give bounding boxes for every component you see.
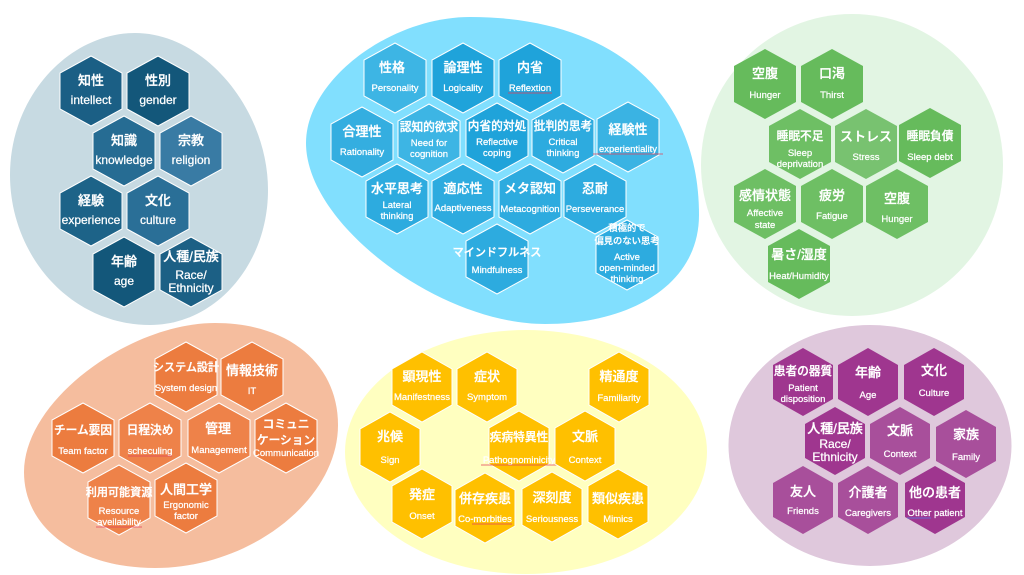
hex: hunger (2): Hunger bbox=[881, 214, 913, 225]
hex: knowledge: knowledge bbox=[95, 153, 153, 167]
hex: heat/humidity bbox=[768, 229, 830, 299]
hex: ergonomic factor bbox=[155, 463, 217, 533]
hex: family bbox=[936, 410, 996, 478]
hex: metacognition bbox=[499, 164, 561, 234]
hex: religion: 宗教 bbox=[178, 133, 204, 148]
hex: experientiality: 経験性 bbox=[608, 122, 648, 137]
hex: hunger (2) bbox=[866, 169, 928, 239]
hex: family: Family bbox=[952, 452, 980, 463]
hex: active open-minded thinking bbox=[594, 220, 660, 290]
hex: team factor: チーム要因 bbox=[54, 424, 112, 437]
hex: co-morbidities: 併存疾患 bbox=[459, 491, 511, 506]
hex: reflective coping: 内省的対処 bbox=[468, 119, 527, 133]
hex: race/ethnicity: Ethnicity bbox=[168, 281, 214, 295]
hex: sleep debt: Sleep debt bbox=[907, 152, 953, 163]
hex: age: 年齢 bbox=[855, 365, 881, 380]
hex: other patient: Other patient bbox=[908, 508, 963, 519]
hex: age bbox=[93, 237, 155, 307]
hex: friends: Friends bbox=[787, 506, 819, 517]
hex: management bbox=[188, 403, 250, 473]
hex: personality bbox=[364, 43, 426, 113]
hex: IT: 情報技術 bbox=[226, 363, 278, 378]
hex: need for cognition: Need for bbox=[411, 138, 447, 149]
hex: context bbox=[870, 407, 930, 475]
hex: communication: コミュニ bbox=[263, 418, 309, 431]
hex: friends bbox=[773, 466, 833, 534]
hex: active open-minded thinking: 偏見のない思考 bbox=[594, 235, 660, 246]
hex: heat/humidity: 暑さ/湿度 bbox=[771, 247, 827, 262]
hex: mimics bbox=[588, 469, 648, 539]
hex: knowledge bbox=[93, 116, 155, 186]
hex: stress: Stress bbox=[853, 152, 880, 163]
hex: family: 家族 bbox=[953, 427, 979, 442]
hex: adaptiveness: 適応性 bbox=[443, 181, 483, 196]
hex: age: age bbox=[114, 274, 134, 288]
hex: sleep deprivation: deprivation bbox=[777, 159, 823, 170]
hex: critical thinking bbox=[532, 103, 594, 173]
hex: reflexion: 内省 bbox=[517, 60, 543, 75]
hex: experientiality bbox=[593, 102, 663, 172]
hex: lateral thinking: 水平思考 bbox=[371, 181, 423, 196]
hex: culture bbox=[904, 348, 964, 416]
hex: mimics: 類似疾患 bbox=[592, 491, 644, 506]
hex: critical thinking: Critical bbox=[548, 137, 578, 148]
panel background bbox=[306, 17, 699, 324]
hex: context bbox=[555, 411, 615, 481]
hex: personality: Personality bbox=[372, 83, 419, 94]
hex: affective state: Affective bbox=[747, 208, 783, 219]
hex: mindfulness bbox=[453, 224, 541, 294]
hex: adaptiveness bbox=[432, 164, 494, 234]
hex: hunger (2): 空腹 bbox=[884, 191, 910, 206]
hex: race/ethnicity: 人種/民族 bbox=[807, 421, 863, 436]
hex: personality: 性格 bbox=[379, 60, 405, 75]
hex: other patient bbox=[905, 466, 965, 534]
hex: religion bbox=[160, 116, 222, 186]
hex: familiarity: Familiarity bbox=[597, 393, 641, 404]
hex: sign: 兆候 bbox=[377, 429, 403, 444]
hex: familiarity: 精通度 bbox=[599, 369, 639, 384]
hex: ergonomic factor: Ergonomic bbox=[163, 500, 209, 511]
panel: disease factors (yellow) bbox=[345, 330, 707, 574]
hex: onset bbox=[392, 469, 452, 539]
hex: management: 管理 bbox=[205, 421, 231, 436]
hex: team factor bbox=[52, 403, 114, 473]
hex: race/ethnicity: 人種/民族 bbox=[163, 249, 219, 264]
hex: logicality: 論理性 bbox=[443, 60, 483, 75]
panel background bbox=[24, 323, 338, 568]
hex: mindfulness: マインドフルネス bbox=[453, 246, 541, 259]
hex: active open-minded thinking: thinking bbox=[611, 274, 643, 285]
hex: race/ethnicity: Ethnicity bbox=[812, 450, 858, 464]
panel background bbox=[10, 33, 268, 325]
hex: lateral thinking: thinking bbox=[381, 211, 413, 222]
hex: experientiality: experientiality bbox=[599, 144, 657, 155]
hex: scheduling: scheculing bbox=[128, 446, 172, 457]
hex: seriousness bbox=[522, 472, 582, 542]
hex: reflective coping: Reflective bbox=[476, 137, 518, 148]
hex: sleep debt: 睡眠負債 bbox=[907, 129, 954, 143]
hex: reflexion: Reflextion bbox=[509, 83, 551, 94]
hex: fatigue bbox=[801, 169, 863, 239]
hex: need for cognition: 認知的欲求 bbox=[400, 120, 459, 134]
hex: resource availability: aveilability bbox=[97, 517, 141, 528]
hex: friends: 友人 bbox=[790, 484, 816, 499]
hex: intellect: intellect bbox=[71, 93, 112, 107]
panel: patient and social factors (purple) bbox=[728, 325, 1012, 566]
hex: culture: 文化 bbox=[921, 363, 947, 378]
hex: co-morbidities: Co-morbities bbox=[458, 514, 512, 525]
hex: critical thinking: 批判的思考 bbox=[534, 119, 592, 133]
hex: sleep deprivation: 睡眠不足 bbox=[777, 129, 824, 143]
hex: sleep deprivation bbox=[769, 109, 831, 179]
hex: resource availability: Resource bbox=[99, 506, 139, 517]
hex: pathognomonicity bbox=[481, 411, 557, 481]
hex: hunger: Hunger bbox=[749, 90, 781, 101]
hex: perseverance bbox=[564, 164, 626, 234]
hex: culture: Culture bbox=[919, 388, 949, 399]
hex: team factor: Team factor bbox=[58, 446, 108, 457]
hex: mindfulness: Mindfulness bbox=[472, 265, 523, 276]
hex: scheduling bbox=[119, 403, 181, 473]
hex: race/ethnicity bbox=[805, 407, 865, 475]
hex: system design bbox=[153, 342, 219, 412]
hex: pathognomonicity: Pathognominicity bbox=[483, 455, 555, 466]
hex: logicality bbox=[432, 43, 494, 113]
hex: perseverance: 忍耐 bbox=[582, 181, 608, 196]
hex: fatigue: Fatigue bbox=[816, 211, 848, 222]
hex: culture: culture bbox=[140, 213, 176, 227]
hex: hunger bbox=[734, 49, 796, 119]
hex: manifestness bbox=[392, 352, 452, 422]
hex: need for cognition: cognition bbox=[410, 149, 448, 160]
hex: metacognition: Metacognition bbox=[500, 204, 560, 215]
hex: experience: experience bbox=[62, 213, 121, 227]
hex: mimics: Mimics bbox=[603, 514, 633, 525]
panel background bbox=[728, 325, 1012, 566]
hex: race/ethnicity bbox=[160, 237, 222, 307]
hex: co-morbidities bbox=[455, 473, 515, 543]
hex: symptom bbox=[457, 352, 517, 422]
hex: affective state: state bbox=[755, 220, 775, 231]
panel: physiological factors (green) bbox=[701, 14, 1003, 316]
hex: rationality: 合理性 bbox=[342, 124, 382, 139]
hex: hunger: 空腹 bbox=[752, 66, 778, 81]
hex: logicality: Logicality bbox=[443, 83, 483, 94]
hex: race/ethnicity: Race/ bbox=[819, 437, 851, 451]
hex: rationality: Rationality bbox=[340, 147, 384, 158]
hex: sign bbox=[360, 412, 420, 482]
hex: age: 年齢 bbox=[111, 254, 137, 269]
hex: onset: 発症 bbox=[409, 487, 435, 502]
hex: familiarity bbox=[589, 352, 649, 422]
hex: context: 文脈 bbox=[572, 429, 598, 444]
hex: experience bbox=[60, 176, 122, 246]
hex: active open-minded thinking: Active bbox=[614, 252, 640, 263]
hex: stress bbox=[835, 109, 897, 179]
hex: religion: religion bbox=[172, 153, 210, 167]
hex: perseverance: Perseverance bbox=[566, 204, 624, 215]
hex: experience: 経験 bbox=[78, 193, 104, 208]
hex: reflective coping: coping bbox=[483, 148, 511, 159]
hex: pathognomonicity: 疾病特異性 bbox=[490, 430, 549, 444]
hex: patient disposition: disposition bbox=[781, 394, 825, 405]
hex: scheduling: 日程決め bbox=[127, 423, 173, 437]
hex: intellect bbox=[60, 56, 122, 126]
hex: communication: Communication bbox=[253, 448, 319, 459]
hex: symptom: 症状 bbox=[474, 369, 500, 384]
hex: caregivers: Caregivers bbox=[845, 508, 891, 519]
hex: thirst: Thirst bbox=[820, 90, 844, 101]
hex: affective state: 感情状態 bbox=[739, 188, 791, 203]
hex: heat/humidity: Heat/Humidity bbox=[769, 271, 829, 282]
hex: lateral thinking: Lateral bbox=[382, 200, 412, 211]
hex: ergonomic factor: factor bbox=[174, 511, 198, 522]
hex: race/ethnicity: Race/ bbox=[175, 268, 207, 282]
hex: context: Context bbox=[569, 455, 602, 466]
hex: caregivers bbox=[838, 466, 898, 534]
hex: gender bbox=[127, 56, 189, 126]
hex: IT bbox=[221, 342, 283, 412]
hex: active open-minded thinking: 積極的で bbox=[608, 222, 646, 233]
panel background bbox=[345, 330, 707, 574]
hex: knowledge: 知識 bbox=[111, 133, 137, 148]
hex: system design: System design bbox=[155, 383, 217, 394]
hex: other patient: 他の患者 bbox=[909, 485, 961, 500]
hex: patient disposition bbox=[773, 348, 833, 416]
hex: communication bbox=[253, 403, 319, 473]
hex: context: Context bbox=[884, 449, 917, 460]
hex: onset: Onset bbox=[409, 511, 435, 522]
hex: communication: ケーション bbox=[257, 434, 315, 447]
hex: lateral thinking bbox=[366, 164, 428, 234]
panel: cognitive factors (sky blue) bbox=[306, 17, 699, 324]
panel: system factors (orange) bbox=[24, 323, 338, 568]
hex: manifestness: Manifestness bbox=[394, 392, 450, 403]
hex: reflective coping bbox=[466, 103, 528, 173]
hex: metacognition: メタ認知 bbox=[504, 181, 556, 196]
hex: IT: IT bbox=[248, 386, 256, 397]
hex: seriousness: Seriousness bbox=[526, 514, 578, 525]
hex: gender: 性別 bbox=[145, 73, 171, 88]
hex: culture bbox=[127, 176, 189, 246]
hex: affective state bbox=[734, 169, 796, 239]
hex: resource availability: 利用可能資源 bbox=[86, 485, 152, 499]
hex: seriousness: 深刻度 bbox=[532, 490, 572, 505]
hex: thirst: 口渇 bbox=[819, 66, 845, 81]
hex: age: Age bbox=[860, 390, 876, 401]
hex: management: Management bbox=[191, 445, 247, 456]
hex: caregivers: 介護者 bbox=[848, 485, 888, 500]
hex: culture: 文化 bbox=[145, 193, 171, 208]
hex: fatigue: 疲労 bbox=[819, 188, 845, 203]
hex: resource availability bbox=[86, 465, 152, 535]
hex: sign: Sign bbox=[380, 455, 400, 466]
hex: critical thinking: thinking bbox=[547, 148, 579, 159]
hex: stress: ストレス bbox=[840, 129, 892, 144]
hex: adaptiveness: Adaptiveness bbox=[434, 203, 492, 214]
hex: sleep deprivation: Sleep bbox=[788, 148, 812, 159]
panel background bbox=[701, 14, 1003, 316]
hex: patient disposition: Patient bbox=[788, 383, 818, 394]
hex: thirst bbox=[801, 49, 863, 119]
hex: ergonomic factor: 人間工学 bbox=[160, 482, 212, 497]
hex: symptom: Symptom bbox=[467, 392, 507, 403]
hex: need for cognition bbox=[398, 104, 460, 174]
hex: rationality bbox=[331, 107, 393, 177]
hex: active open-minded thinking: open-minded bbox=[599, 263, 655, 274]
hex: sleep debt bbox=[899, 108, 961, 178]
hex: age bbox=[838, 348, 898, 416]
hex: intellect: 知性 bbox=[78, 73, 104, 88]
hex: context: 文脈 bbox=[887, 423, 913, 438]
hex: reflexion bbox=[499, 43, 561, 113]
hex: patient disposition: 患者の器質 bbox=[774, 364, 833, 378]
hex: system design: システム設計 bbox=[153, 360, 219, 374]
panel: personal attributes (navy) bbox=[10, 33, 268, 325]
hex: gender: gender bbox=[139, 93, 177, 107]
hex: manifestness: 顕現性 bbox=[402, 369, 442, 384]
